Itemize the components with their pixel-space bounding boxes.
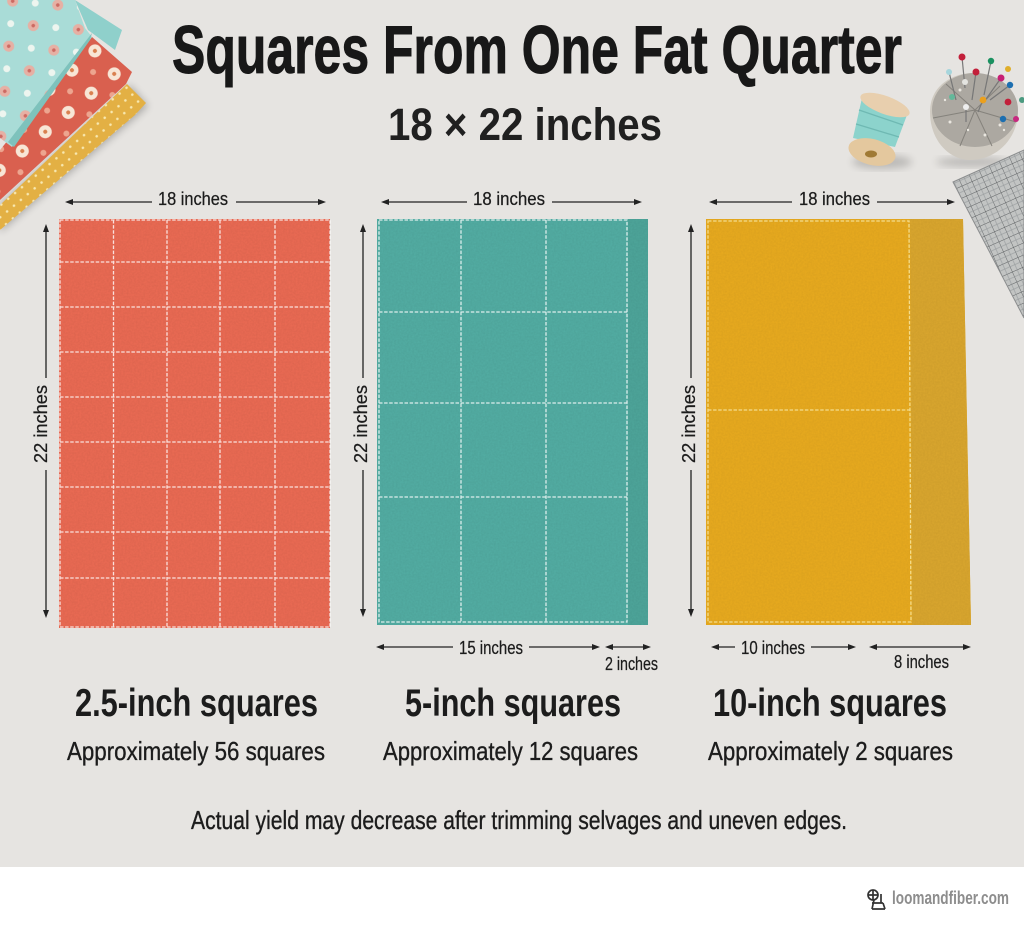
dimension: 2 inches	[605, 644, 658, 674]
dimension: top 18 inches, panel 1	[65, 189, 326, 209]
heading: 10-inch squares: 10-inch squares	[713, 682, 947, 725]
dimension: left 22 inches, panel 3	[679, 224, 699, 617]
dimension: top 18 inches, panel 3	[709, 189, 955, 209]
dimension: 15 inches	[376, 638, 600, 658]
panel: 2.5-inch squares fabric	[59, 219, 330, 628]
icon: pincushion	[930, 54, 1024, 167]
coral fabric	[0, 37, 132, 200]
dimension: 2 inches: 2 inches	[605, 654, 658, 674]
subtitle: 18 × 22 inches	[388, 99, 662, 150]
dimension: 15 inches: 15 inches	[459, 638, 523, 658]
footnote: Actual yield may decrease after trimming selvages and uneven edges.	[191, 805, 847, 835]
dimension: left 22 inches, panel 2	[351, 224, 371, 617]
pins	[949, 57, 1010, 122]
dimension: 8 inches	[869, 644, 971, 672]
leftover strip	[910, 219, 971, 625]
dimension: top 18 inches, panel 2	[381, 189, 642, 209]
text: approximately 2 squares: Approximately 2 squares	[708, 736, 953, 766]
blue fabric back fold	[75, 0, 122, 50]
icon: quilting ruler	[953, 150, 1024, 318]
dimension: left 22 inches, panel 1: 22 inches	[31, 385, 51, 463]
text: approximately 56 squares: Approximately 56 squares	[67, 736, 325, 766]
stitched cutting grid	[708, 221, 911, 622]
icon: thread spool	[846, 88, 913, 170]
dimension: left 22 inches, panel 2: 22 inches	[351, 385, 371, 463]
dimension: top 18 inches, panel 3: 18 inches	[799, 189, 870, 209]
dimension: top 18 inches, panel 1: 18 inches	[158, 189, 228, 209]
footer band	[0, 867, 1024, 939]
decorative fabric stack	[0, 0, 148, 232]
panel: 10-inch squares fabric	[706, 219, 972, 625]
yellow fabric	[0, 84, 146, 230]
dimension: 10 inches: 10 inches	[741, 638, 805, 658]
leftover strip	[628, 219, 648, 625]
dimension: left 22 inches, panel 3: 22 inches	[679, 385, 699, 463]
panel: 5-inch squares fabric	[377, 219, 648, 625]
dimension: top 18 inches, panel 2: 18 inches	[473, 189, 545, 209]
heading: 2.5-inch squares: 2.5-inch squares	[75, 682, 318, 725]
dimension: 8 inches: 8 inches	[894, 652, 949, 672]
blue fabric	[0, 0, 92, 147]
stitched cutting grid	[379, 220, 627, 622]
dimension: left 22 inches, panel 1	[31, 224, 51, 618]
dimension: 10 inches	[711, 638, 856, 658]
icon: spinning wheel logo	[868, 890, 885, 909]
heading: 5-inch squares: 5-inch squares	[405, 682, 621, 725]
stitched cutting grid	[60, 220, 330, 627]
text: approximately 12 squares: Approximately 12 squares	[383, 736, 638, 766]
